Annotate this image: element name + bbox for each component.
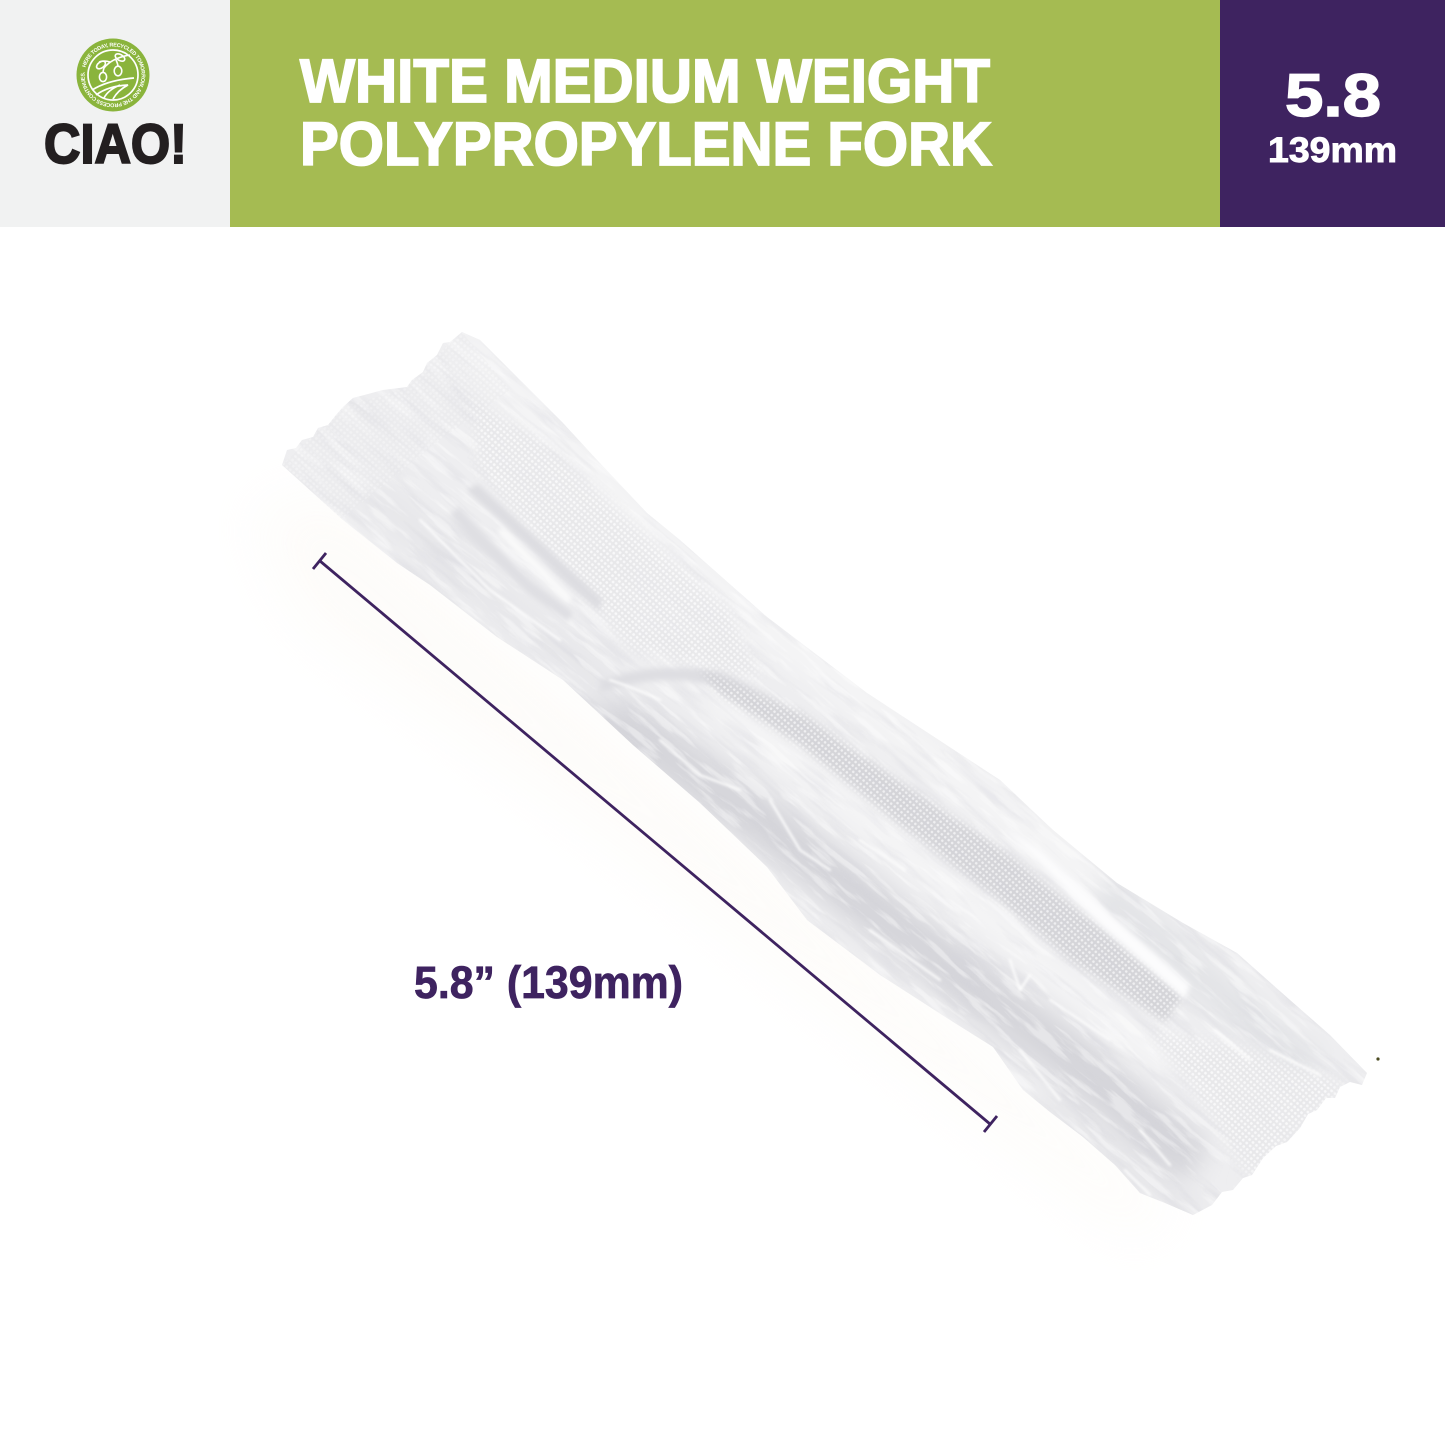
crumpled film texture: shadows (350, 402, 1297, 1198)
embossed handle mesh (710, 675, 1180, 1021)
fork package (282, 332, 1367, 1215)
wrapper film (282, 332, 1367, 1215)
sealed end mesh at top (282, 332, 510, 520)
logo wordmark: CIAO! (44, 112, 187, 175)
size in millimetres: 139mm (1268, 131, 1397, 170)
crumpled film texture: highlights (318, 398, 1321, 1211)
panel: title (230, 0, 1220, 227)
soft tonal bands (590, 692, 1306, 1186)
fork head mesh (474, 411, 749, 670)
film shading and fork (298, 341, 1336, 1211)
header band (0, 0, 1445, 227)
fork shoulder crescent (606, 667, 757, 693)
bright highlight along handle (1026, 845, 1190, 999)
soft shadow beneath package (250, 490, 1180, 1235)
sealed end mesh at bottom (1168, 1040, 1330, 1168)
speck (1376, 1057, 1380, 1061)
icon: olive branch seal: HERE TODAY, RECYCLED TOMORROW, AND THE PROCESS CONTINUES. (80, 42, 146, 108)
wrinkles (420, 520, 1320, 1195)
icon: fork tines (450, 484, 603, 622)
dimension label: 5.8” (139mm) (414, 957, 683, 1008)
panel: logo (0, 0, 230, 227)
panel: size badge (1220, 0, 1445, 227)
title line 2: POLYPROPYLENE FORK (300, 110, 992, 178)
title line 1: WHITE MEDIUM WEIGHT (300, 47, 990, 115)
dimension line (313, 553, 997, 1132)
size in inches: 5.8 (1285, 62, 1381, 129)
